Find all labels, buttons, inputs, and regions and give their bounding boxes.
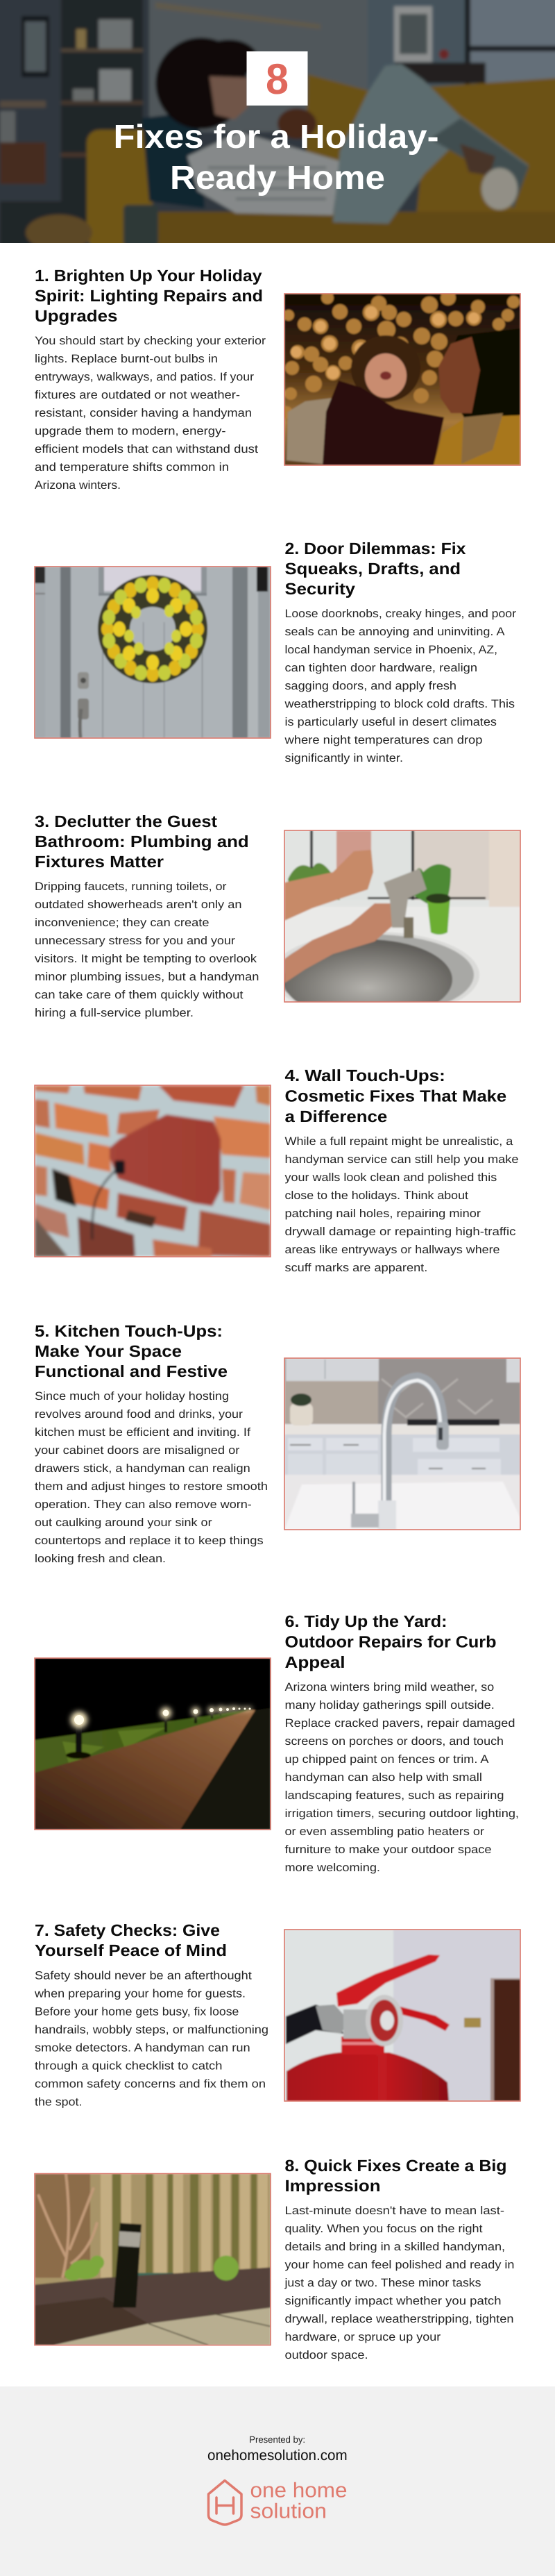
- body text 7: handrails, wobbly steps, or malfunctioning: [35, 2023, 268, 2036]
- body text 8: [284, 2205, 515, 2361]
- body text 8: outdoor space.: [284, 2349, 368, 2361]
- heading 1: Spirit: Lighting Repairs and: [35, 287, 263, 305]
- body text 7: common safety concerns and fix them on: [35, 2077, 266, 2090]
- heading 5: 5. Kitchen Touch-Ups:: [35, 1322, 223, 1340]
- body text 5: looking fresh and clean.: [35, 1553, 166, 1565]
- hero banner: [0, 0, 555, 251]
- photo: chrome faucet in white kitchen: [284, 1358, 520, 1530]
- section 5: kitchen: [35, 1322, 520, 1565]
- section 8: quick fixes: [35, 2157, 515, 2361]
- body text 5: out caulking around your sink or: [35, 1516, 212, 1529]
- section 3: bathroom plumbing: [35, 812, 520, 1020]
- heading 4: 4. Wall Touch-Ups:: [284, 1067, 445, 1085]
- body text 1: lights. Replace burnt-out bulbs in: [35, 353, 218, 365]
- heading 3: 3. Declutter the Guest: [35, 812, 217, 830]
- body text 7: Safety should never be an afterthought: [35, 1969, 252, 1982]
- body text 4: While a full repaint might be unrealistic, a: [284, 1135, 513, 1148]
- heading 1: [35, 267, 263, 325]
- body text 3: minor plumbing issues, but a handyman: [35, 971, 259, 983]
- body text 3: unnecessary stress for you and your: [35, 935, 235, 947]
- photo: garden post by a wooden fence: [35, 2173, 271, 2345]
- body text 6: Arizona winters bring mild weather, so: [284, 1681, 494, 1693]
- icon: house with H: [208, 2480, 241, 2525]
- logo: one home solution: [208, 2479, 347, 2525]
- heading 7: Yourself Peace of Mind: [35, 1941, 227, 1959]
- body text 4: areas like entryways or hallways where: [284, 1244, 500, 1256]
- body text 7: Before your home gets busy, fix loose: [35, 2005, 239, 2018]
- photo: hands fitting a faucet at a round sink: [284, 830, 521, 1003]
- body text 8: your home can feel polished and ready in: [284, 2259, 515, 2271]
- body text 8: drywall, replace weatherstripping, tighten: [284, 2313, 513, 2325]
- heading 6: Outdoor Repairs for Curb: [284, 1633, 497, 1651]
- body text 6: furniture to make your outdoor space: [284, 1843, 491, 1856]
- logo wordmark: [250, 2479, 347, 2523]
- body text 3: outdated showerheads aren't only an: [35, 898, 241, 911]
- hero photo: woman relaxing on a sofa: [0, 0, 555, 251]
- body text 2: is particularly useful in desert climates: [284, 716, 497, 728]
- body text 6: up chipped paint on fences or trim. A: [284, 1753, 488, 1766]
- photo: mother and child under holiday lights: [280, 290, 520, 465]
- website: onehomesolution.com: [207, 2448, 348, 2464]
- body text 1: Arizona winters.: [35, 479, 121, 492]
- body text 5: drawers stick, a handyman can realign: [35, 1462, 250, 1475]
- body text 4: handyman service can still help you make: [284, 1153, 519, 1166]
- heading 6: 6. Tidy Up the Yard:: [284, 1612, 447, 1630]
- heading 6: [284, 1612, 497, 1671]
- body text 1: [35, 335, 266, 492]
- body text 5: operation. They can also remove worn-: [35, 1498, 252, 1511]
- section 2: doors: [35, 540, 517, 764]
- body text 1: You should start by checking your exterior: [35, 335, 266, 347]
- heading 2: Security: [284, 580, 355, 598]
- body text 6: handyman can also help with small: [284, 1771, 482, 1784]
- body text 8: hardware, or spruce up your: [284, 2331, 441, 2343]
- body text 8: quality. When you focus on the right: [284, 2223, 483, 2235]
- body text 7: the spot.: [35, 2096, 82, 2108]
- body text 2: weatherstripping to block cold drafts. This: [284, 698, 515, 710]
- heading 8: Impression: [284, 2177, 380, 2195]
- title: Fixes for a Holiday-: [114, 119, 438, 156]
- body text 7: smoke detectors. A handyman can run: [35, 2041, 250, 2054]
- body text 8: details and bring in a skilled handyman,: [284, 2241, 505, 2253]
- heading 8: 8. Quick Fixes Create a Big: [284, 2157, 506, 2175]
- body text 6: more welcoming.: [284, 1862, 380, 1874]
- body text 3: [35, 880, 259, 1019]
- photo: brick wall with red cover: [35, 1085, 271, 1257]
- body text 2: Loose doorknobs, creaky hinges, and poor: [284, 608, 517, 620]
- heading 7: 7. Safety Checks: Give: [35, 1921, 220, 1939]
- body text 4: [284, 1135, 519, 1274]
- body text 6: Replace cracked pavers, repair damaged: [284, 1717, 515, 1730]
- body text 7: through a quick checklist to catch: [35, 2059, 222, 2072]
- section 4: wall touch-ups: [35, 1067, 519, 1274]
- heading 4: [284, 1067, 506, 1126]
- body text 2: sagging doors, and apply fresh: [284, 680, 456, 692]
- body text 4: drywall damage or repainting high-traffic: [284, 1226, 516, 1238]
- body text 5: [35, 1390, 268, 1565]
- body text 1: resistant, consider having a handyman: [35, 407, 252, 419]
- body text 3: can take care of them quickly without: [35, 989, 244, 1001]
- photo: lit garden path at night: [35, 1658, 271, 1830]
- number badge: [247, 51, 308, 106]
- body text 6: screens on porches or doors, and touch: [284, 1735, 504, 1748]
- body text 3: hiring a full-service plumber.: [35, 1007, 194, 1019]
- heading 4: Cosmetic Fixes That Make: [284, 1087, 506, 1105]
- heading 3: Bathroom: Plumbing and: [35, 833, 249, 851]
- section 1: lighting: [35, 267, 520, 492]
- body text 6: many holiday gatherings spill outside.: [284, 1699, 495, 1712]
- heading 2: 2. Door Dilemmas: Fix: [284, 540, 466, 558]
- body text 4: scuff marks are apparent.: [284, 1262, 427, 1274]
- body text 4: your walls look clean and polished this: [284, 1171, 497, 1184]
- body text 7: when preparing your home for guests.: [34, 1987, 246, 2000]
- heading 5: Make Your Space: [35, 1342, 182, 1360]
- heading 2: Squeaks, Drafts, and: [284, 560, 461, 578]
- body text 8: significantly impact whether you patch: [284, 2295, 501, 2307]
- body text 8: just a day or two. These minor tasks: [284, 2277, 481, 2289]
- heading 3: Fixtures Matter: [35, 853, 164, 871]
- heading 1: Upgrades: [35, 307, 117, 325]
- body text 2: local handyman service in Phoenix, AZ,: [284, 644, 497, 656]
- body text 8: Last-minute doesn't have to mean last-: [284, 2205, 504, 2217]
- presented by label: Presented by:: [249, 2434, 305, 2445]
- section 7: safety: [34, 1921, 520, 2108]
- body text 5: them and adjust hinges to restore smooth: [35, 1480, 268, 1493]
- heading 7: [35, 1921, 227, 1959]
- heading 8: [284, 2157, 506, 2195]
- footer panel: [0, 2386, 555, 2576]
- number badge: 8: [266, 56, 289, 103]
- section 6: yard: [35, 1612, 519, 1874]
- body text 1: and temperature shifts common in: [35, 461, 229, 474]
- body text 5: Since much of your holiday hosting: [35, 1390, 229, 1403]
- heading 5: [35, 1322, 228, 1380]
- heading 6: Appeal: [284, 1653, 345, 1671]
- body text 2: significantly in winter.: [284, 752, 403, 764]
- body text 4: close to the holidays. Think about: [284, 1189, 468, 1202]
- body text 3: inconvenience; they can create: [35, 917, 210, 929]
- photo: grey door with yellow tulip wreath: [35, 567, 271, 738]
- body text 5: your cabinet doors are misaligned or: [35, 1444, 240, 1457]
- logo wordmark: one home: [250, 2479, 347, 2502]
- body text 6: [284, 1681, 519, 1874]
- body text 1: entryways, walkways, and patios. If your: [35, 371, 255, 383]
- body text 6: irrigation timers, securing outdoor lighting,: [284, 1807, 519, 1820]
- body text 5: kitchen must be efficient and inviting. If: [35, 1426, 250, 1439]
- heading 1: 1. Brighten Up Your Holiday: [35, 267, 262, 285]
- body text 6: landscaping features, such as repairing: [284, 1789, 504, 1802]
- body text 5: countertops and replace it to keep things: [35, 1534, 264, 1547]
- body text 2: can tighten door hardware, realign: [284, 662, 477, 674]
- body text 2: [284, 608, 517, 764]
- body text 4: patching nail holes, repairing minor: [284, 1207, 481, 1220]
- heading 5: Functional and Festive: [35, 1362, 228, 1380]
- body text 7: [34, 1969, 268, 2108]
- heading 3: [35, 812, 249, 871]
- heading 2: [284, 540, 466, 598]
- logo wordmark: solution: [250, 2500, 327, 2523]
- body text 2: where night temperatures can drop: [284, 734, 483, 746]
- body text 1: upgrade them to modern, energy-: [35, 425, 226, 437]
- heading 4: a Difference: [284, 1107, 387, 1126]
- body text 6: or even assembling patio heaters or: [284, 1825, 485, 1838]
- body text 3: Dripping faucets, running toilets, or: [35, 880, 227, 893]
- title: Ready Home: [170, 160, 385, 196]
- title: [114, 119, 438, 196]
- body text 3: visitors. It might be tempting to overlook: [35, 953, 257, 965]
- body text 1: efficient models that can withstand dust: [35, 443, 258, 455]
- body text 5: revolves around food and drinks, your: [35, 1408, 244, 1421]
- body text 1: fixtures are outdated or not weather-: [35, 389, 240, 401]
- photo: red fire extinguisher: [284, 1930, 520, 2101]
- body text 2: seals can be annoying and uninviting. A: [284, 626, 505, 638]
